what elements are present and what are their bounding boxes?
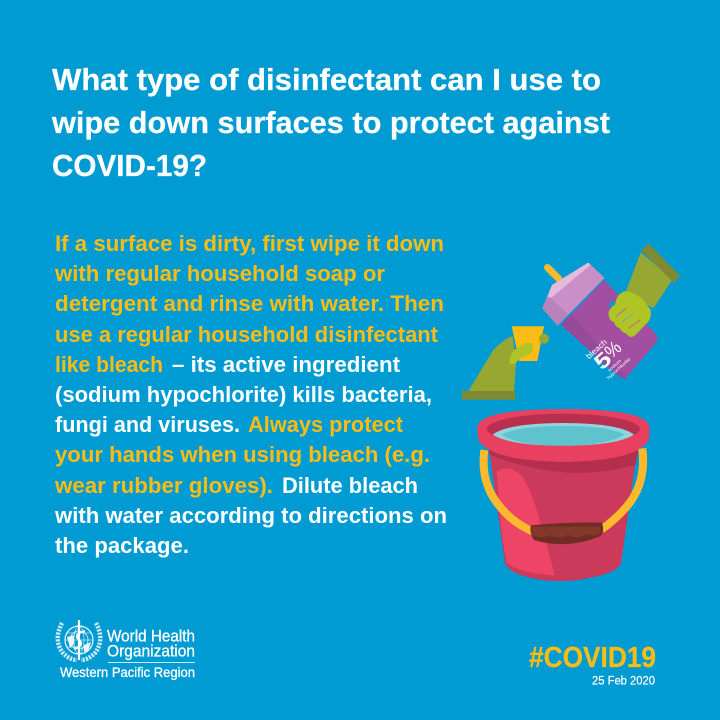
body text: with regular household soap or bbox=[54, 261, 385, 286]
bucket body bbox=[488, 443, 638, 581]
body text: like bleach bbox=[55, 352, 163, 377]
bottle notch bbox=[608, 300, 617, 306]
bottle label: 5 bbox=[590, 347, 617, 375]
icon: bottle straw bbox=[548, 268, 558, 278]
title: wipe down surfaces to protect against bbox=[51, 106, 610, 140]
bottle label: bleach bbox=[584, 338, 609, 361]
illustration: hands pouring bleach bbox=[462, 244, 680, 400]
body text: use a regular household disinfectant bbox=[55, 322, 439, 347]
hashtag: #COVID19 bbox=[529, 642, 656, 674]
body text: your hands when using bleach (e.g. bbox=[55, 442, 430, 467]
body text: If a surface is dirty, first wipe it down bbox=[55, 231, 444, 256]
icon: right hand glove bbox=[608, 291, 651, 337]
logo wordmark bbox=[60, 628, 195, 680]
body text: Dilute bleach bbox=[282, 473, 418, 498]
bucket rim and water bbox=[477, 409, 649, 462]
illustration: red bucket bbox=[477, 409, 649, 581]
icon: left hand glove bbox=[510, 334, 549, 364]
body text: (sodium hypochlorite) kills bacteria, bbox=[55, 382, 432, 407]
icon: measuring cup bbox=[512, 326, 544, 361]
bucket handle bbox=[484, 448, 643, 544]
date: 25 Feb 2020 bbox=[592, 676, 655, 688]
WHO logo bbox=[58, 620, 195, 680]
body text: with water according to directions on bbox=[54, 503, 447, 528]
body text bbox=[54, 231, 447, 558]
bottle cap bbox=[542, 262, 604, 326]
bottle label bbox=[584, 333, 632, 381]
icon: WHO emblem bbox=[58, 620, 100, 660]
body text: detergent and rinse with water. Then bbox=[55, 291, 444, 316]
bottle label: sodium bbox=[607, 358, 622, 373]
body text: fungi and viruses. bbox=[55, 412, 240, 437]
logo wordmark: World Health bbox=[107, 628, 195, 646]
logo wordmark: Western Pacific Region bbox=[60, 664, 195, 680]
body text: Always protect bbox=[248, 412, 404, 437]
body text: wear rubber gloves). bbox=[54, 473, 273, 498]
icon: bleach bottle bbox=[542, 262, 658, 381]
body text: – its active ingredient bbox=[172, 352, 401, 377]
icon: left arm bbox=[462, 336, 516, 400]
title bbox=[51, 63, 610, 183]
bottle label: % bbox=[601, 337, 626, 363]
title: What type of disinfectant can I use to bbox=[52, 63, 601, 97]
bottle label: hypochlorite bbox=[606, 356, 632, 380]
icon: right arm bbox=[625, 244, 680, 308]
body text: the package. bbox=[55, 533, 189, 558]
title: COVID-19? bbox=[52, 149, 207, 183]
logo wordmark: Organization bbox=[107, 642, 195, 660]
